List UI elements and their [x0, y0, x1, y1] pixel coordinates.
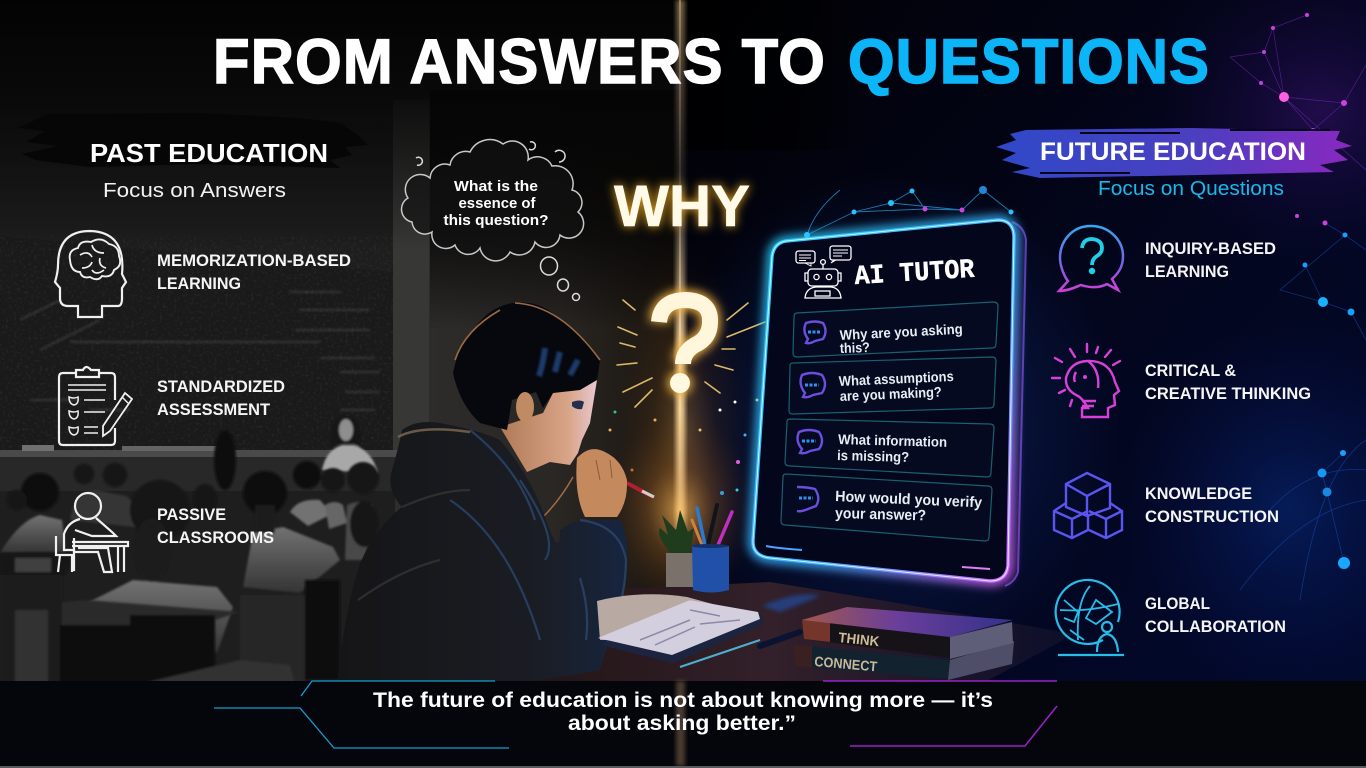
back row — [214, 430, 236, 490]
future item: inquiry: INQUIRY-BASED — [1145, 239, 1276, 258]
past education heading — [18, 113, 368, 202]
neck and face — [500, 380, 597, 472]
ear — [516, 392, 534, 422]
quote frame left — [214, 681, 509, 748]
question card 2 — [789, 357, 996, 414]
AI tutor tablet — [753, 220, 1026, 586]
network above tablet — [804, 186, 1014, 238]
tablet screen — [753, 220, 1014, 581]
background: future half — [660, 0, 1366, 768]
question card 3 — [785, 419, 994, 477]
question card 4: your answer? — [835, 505, 926, 524]
question card 4: How would you verify — [835, 488, 983, 511]
tutor title: AI TUTOR — [854, 256, 976, 293]
icon: cubes — [1054, 473, 1122, 538]
thought bubble: this question? — [444, 212, 548, 229]
brush stroke — [996, 128, 1352, 178]
plant — [659, 510, 694, 587]
network: top right — [1230, 13, 1366, 170]
desk — [460, 582, 1075, 682]
desks — [0, 553, 340, 685]
icon: lightbulb head — [1052, 344, 1120, 417]
title — [213, 27, 1209, 97]
title: FROM ANSWERS TO — [213, 27, 825, 97]
cup — [692, 546, 729, 592]
quote band — [0, 681, 1366, 768]
future education heading: FUTURE EDUCATION — [1040, 138, 1306, 166]
future education heading: Focus on Questions — [1098, 178, 1284, 200]
question card 3: is missing? — [837, 447, 909, 465]
past item: assessment: STANDARDIZED — [157, 377, 285, 396]
question card 1 — [793, 302, 998, 357]
title: QUESTIONS — [848, 27, 1209, 97]
tablet depth edge — [1005, 222, 1026, 586]
network: right blue — [1240, 214, 1366, 600]
question card 1: this? — [840, 339, 870, 356]
brush stroke — [18, 113, 368, 168]
tablet glow — [753, 220, 1014, 581]
thought bubble — [402, 140, 584, 300]
future item: knowledge — [1054, 473, 1279, 538]
past item: memorization — [55, 231, 351, 317]
open book — [597, 594, 800, 667]
why heading: WHY — [614, 174, 750, 239]
book: think: THINK — [838, 629, 880, 649]
stacked books — [793, 607, 1014, 680]
icon: student at desk — [56, 493, 128, 572]
past education heading: Focus on Answers — [103, 179, 286, 202]
background: past half — [0, 0, 690, 768]
sparkles around question mark — [608, 300, 765, 495]
icon: clipboard — [59, 367, 132, 445]
future education heading — [996, 128, 1352, 200]
light beam divider — [605, 0, 755, 680]
question card 2: What assumptions — [838, 368, 954, 389]
hand holding pen — [576, 449, 654, 517]
hoodie highlights — [358, 429, 626, 645]
quote frame right — [823, 681, 1057, 746]
past item: classrooms: PASSIVE — [157, 505, 226, 524]
centre student — [87, 580, 233, 653]
book: think — [802, 607, 1013, 659]
question card 1: Why are you asking — [839, 321, 963, 343]
robot icon — [796, 246, 851, 298]
chalkboard — [0, 236, 428, 457]
question card 2: are you making? — [839, 384, 942, 404]
thought bubble: What is the — [454, 178, 538, 195]
eye — [572, 400, 584, 409]
thought bubble: essence of — [458, 195, 536, 212]
past item: memorization: LEARNING — [157, 274, 241, 293]
past item: memorization: MEMORIZATION-BASED — [157, 251, 351, 270]
future item: inquiry: LEARNING — [1145, 262, 1229, 281]
pens — [692, 505, 732, 545]
right student — [243, 527, 340, 593]
past item: assessment — [59, 367, 285, 445]
why heading: WHY — [614, 174, 750, 239]
quote text: The future of education is not about knowing more — it’s — [373, 689, 993, 712]
quote text: about asking better.” — [568, 712, 796, 735]
teacher — [322, 417, 378, 473]
future item: collaboration: COLLABORATION — [1145, 617, 1286, 636]
past education heading: PAST EDUCATION — [90, 138, 328, 168]
book: connect — [793, 641, 1014, 680]
future item: knowledge: KNOWLEDGE — [1145, 484, 1252, 503]
past item: classrooms: CLASSROOMS — [157, 528, 274, 547]
left student — [0, 515, 66, 553]
past item: assessment: ASSESSMENT — [157, 400, 270, 419]
future item: critical thinking: CREATIVE THINKING — [1145, 384, 1311, 403]
future item: critical thinking — [1052, 344, 1311, 417]
icon: brain head — [55, 231, 126, 317]
question card 3: What information — [838, 431, 947, 450]
past item: classrooms — [56, 493, 274, 572]
future item: knowledge: CONSTRUCTION — [1145, 507, 1279, 526]
desk neon reflection — [762, 594, 820, 612]
hair — [453, 303, 600, 430]
hair highlights — [455, 303, 600, 376]
icon: question bubble — [1059, 226, 1123, 291]
future item: inquiry — [1059, 226, 1276, 291]
future item: collaboration — [1056, 580, 1286, 655]
book: connect: CONNECT — [814, 653, 878, 675]
cord — [543, 477, 573, 517]
future item: collaboration: GLOBAL — [1145, 594, 1210, 613]
glowing question mark — [659, 300, 710, 395]
hoodie — [338, 422, 627, 682]
question card 4 — [781, 474, 992, 541]
icon: globe and person — [1056, 580, 1124, 655]
boy studying — [338, 303, 654, 682]
classroom students — [0, 417, 379, 685]
plant and pen cup — [659, 505, 732, 592]
future item: critical thinking: CRITICAL & — [1145, 361, 1236, 380]
